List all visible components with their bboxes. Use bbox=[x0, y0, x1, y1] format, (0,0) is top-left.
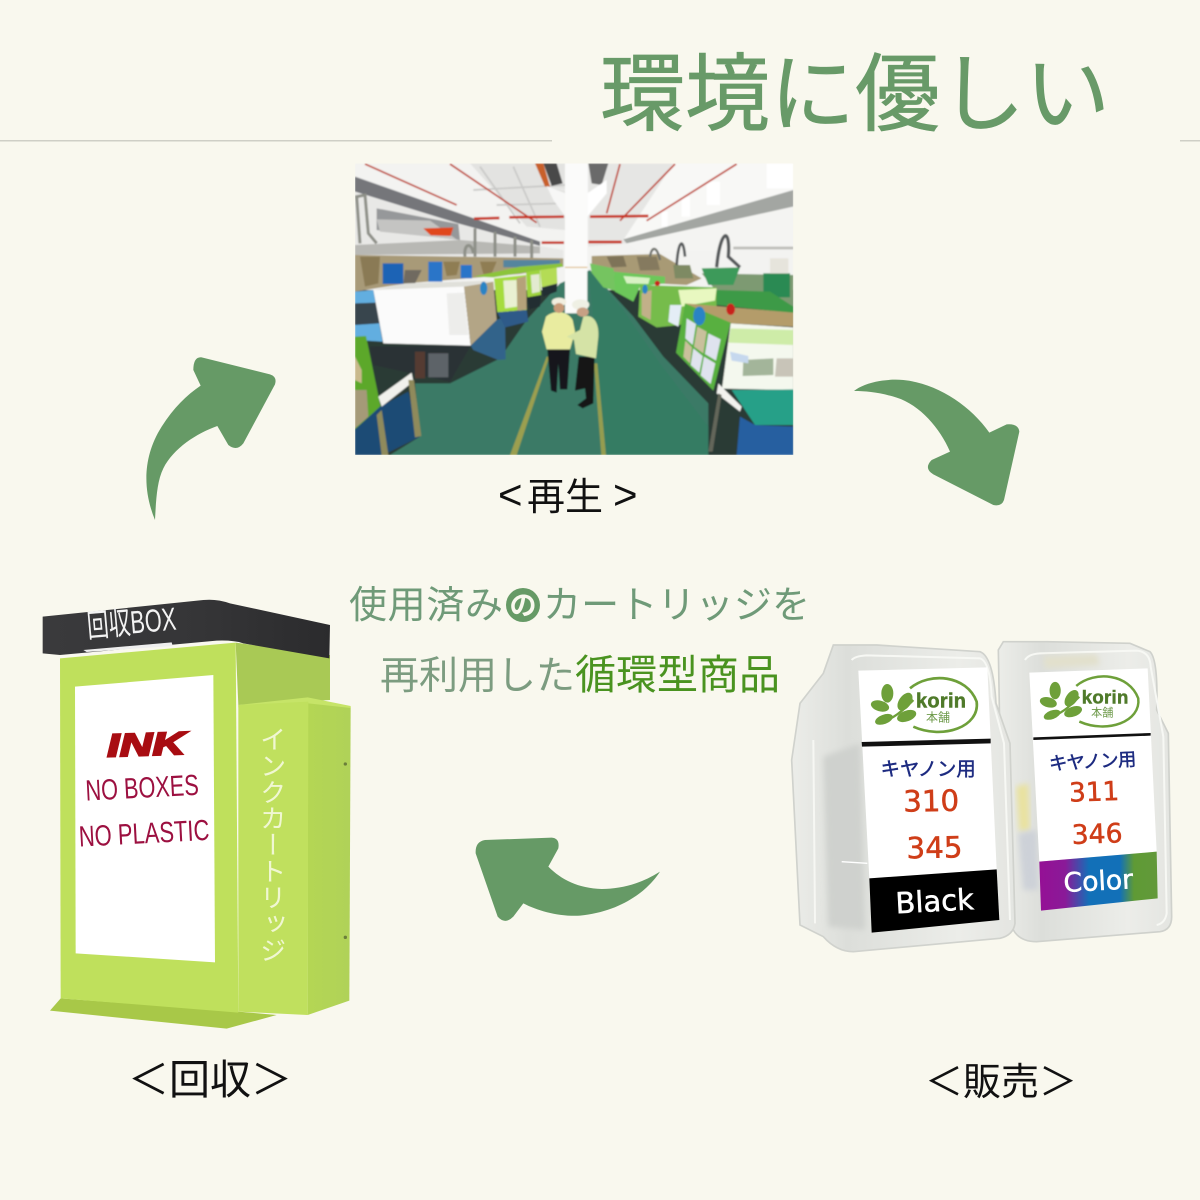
black label: 345 bbox=[906, 830, 963, 865]
black label: korin bbox=[916, 690, 966, 712]
box front bbox=[60, 643, 238, 1013]
black label bbox=[858, 667, 999, 933]
black label: キヤノン用 bbox=[881, 759, 976, 780]
colour cartridge bbox=[998, 642, 1172, 942]
collection box bbox=[43, 600, 351, 1029]
floor bbox=[355, 290, 793, 455]
side cabinet bbox=[238, 697, 351, 1015]
robots left bbox=[357, 195, 532, 260]
white poster: NO PLASTIC bbox=[78, 814, 210, 854]
left machines bbox=[355, 290, 383, 342]
pillar bbox=[588, 180, 607, 215]
black label: 本舗 bbox=[926, 710, 950, 724]
worker right bbox=[575, 357, 595, 408]
caption: regeneration: 再生 bbox=[527, 477, 603, 519]
colour label: 311 bbox=[1069, 777, 1120, 809]
box base bbox=[50, 998, 277, 1029]
black label: Black bbox=[895, 882, 975, 920]
white poster: INK bbox=[106, 725, 190, 764]
message line one: 使用済み bbox=[349, 585, 503, 627]
colour label: キヤノン用 bbox=[1048, 748, 1137, 774]
worker left bbox=[547, 349, 570, 393]
arrow: collection to regeneration bbox=[146, 357, 276, 520]
roof with label bbox=[43, 600, 330, 658]
left machinery band bbox=[355, 255, 563, 292]
ink cartridges bbox=[792, 642, 1172, 952]
caption: regeneration: < bbox=[498, 471, 523, 518]
center message bbox=[349, 585, 810, 698]
caption: regeneration: > bbox=[613, 471, 638, 518]
colour label: Color bbox=[1063, 864, 1134, 899]
side cabinet: インクカートリッジ bbox=[256, 726, 286, 963]
right machines bbox=[590, 263, 617, 292]
arrow: sale to collection bbox=[476, 838, 660, 921]
white poster: NO BOXES bbox=[85, 769, 200, 808]
caption: regeneration bbox=[498, 471, 638, 519]
box upper side bbox=[236, 643, 330, 705]
photo: factory floor bbox=[355, 163, 793, 455]
message line two bbox=[380, 652, 780, 698]
roof with label: 回収BOX bbox=[85, 601, 178, 644]
colour label: 346 bbox=[1071, 818, 1123, 851]
message line one: の bbox=[510, 591, 536, 621]
colour label: 本舗 bbox=[1091, 706, 1113, 720]
right machinery bbox=[592, 254, 702, 285]
black cartridge bbox=[792, 645, 1015, 952]
title: 環境に優しい bbox=[600, 48, 1110, 143]
message line two: 循環型商品 bbox=[575, 652, 780, 698]
white poster bbox=[75, 675, 215, 962]
caption: sale: ＜販売＞ bbox=[925, 1062, 1077, 1104]
colour label bbox=[1029, 668, 1158, 911]
message line one bbox=[349, 585, 810, 627]
message line one: カートリッジを bbox=[543, 585, 810, 627]
black label: 310 bbox=[903, 784, 959, 819]
caption: collection: ＜回収＞ bbox=[128, 1057, 292, 1103]
ceiling cells bbox=[470, 163, 565, 230]
message line two: 再利用した bbox=[380, 655, 575, 698]
colour label: korin bbox=[1082, 687, 1128, 708]
arrow: regeneration to sale bbox=[854, 380, 1019, 505]
